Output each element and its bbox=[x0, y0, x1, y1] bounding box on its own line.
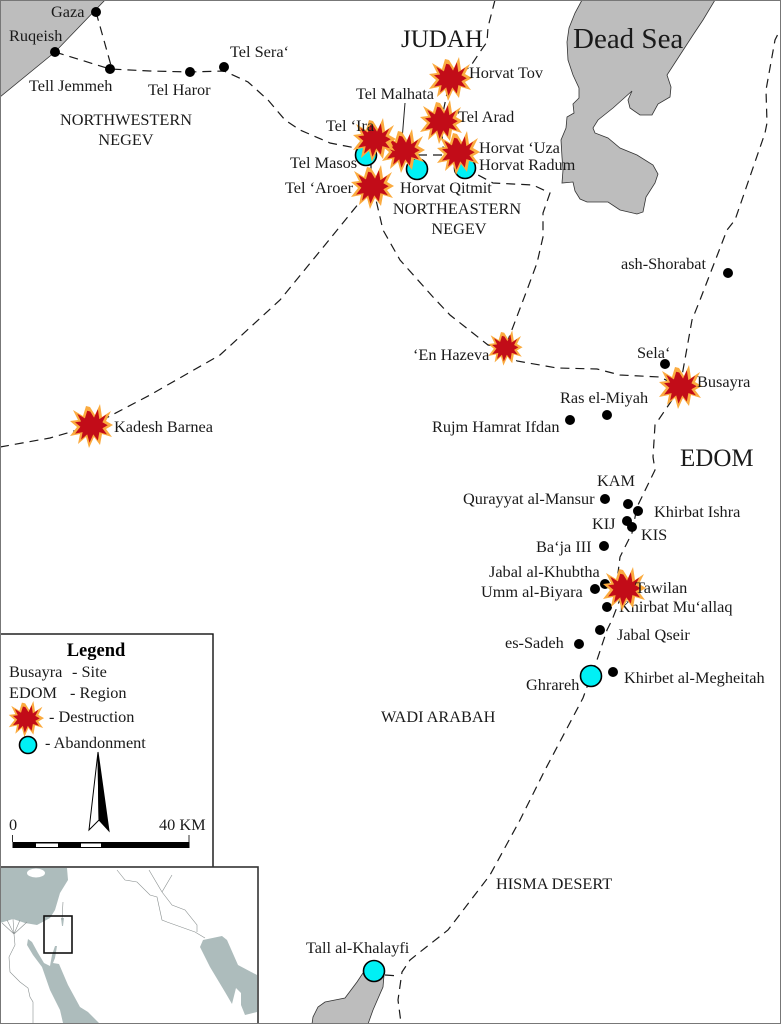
site: Khirbat Ishra: Khirbat Ishra bbox=[654, 502, 740, 521]
inset: study area rectangle bbox=[44, 916, 72, 953]
site: Tel Sera: Tel Sera‘ bbox=[230, 42, 289, 61]
region label: Edom: EDOM bbox=[680, 445, 754, 472]
panel: legend bbox=[0, 634, 213, 868]
site: Tell Jemmeh bbox=[29, 64, 115, 95]
site: KIJ bbox=[592, 514, 632, 533]
site: Jabal al-Khubtha bbox=[489, 562, 610, 589]
abandonment: Tel Masos bbox=[290, 144, 376, 172]
site: Umm al-Biyara: Umm al-Biyara bbox=[481, 582, 583, 601]
site: Qurayyat al-Mansur: Qurayyat al-Mansur bbox=[463, 489, 595, 508]
leader line: Tel Malhata bbox=[402, 103, 405, 140]
destruction: Tel 'Ira: Tel ‘Ira bbox=[326, 116, 374, 135]
destruction: Kadesh Barnea: Kadesh Barnea bbox=[114, 417, 213, 436]
destruction: Kadesh Barnea bbox=[70, 404, 213, 448]
legend: destruction: - Destruction bbox=[49, 707, 134, 726]
site: ash-Shorabat bbox=[621, 254, 733, 278]
region label: Northeastern Negev: NEGEV bbox=[431, 219, 487, 238]
destruction: Tawilan: Tawilan bbox=[635, 578, 687, 597]
inset: Red Sea bbox=[27, 939, 99, 1023]
site: Khirbat Mu'allaq: Khirbat Mu‘allaq bbox=[619, 597, 732, 616]
destruction: Horvat 'Uza bbox=[437, 131, 560, 175]
inset: Dead Sea bbox=[61, 918, 64, 926]
region label: Northeastern Negev: NORTHEASTERN bbox=[393, 199, 521, 218]
site: Gaza: Gaza bbox=[51, 2, 84, 21]
abandonment: Horvat Qitmit: Horvat Qitmit bbox=[400, 178, 492, 197]
site: Tel Sera bbox=[219, 42, 289, 72]
site: KIS: KIS bbox=[641, 525, 667, 544]
inset: rivers bbox=[2, 870, 205, 1023]
site: KIJ: KIJ bbox=[592, 514, 616, 533]
abandonment: Tall al-Khalayfi bbox=[306, 938, 410, 982]
site: Tel Haror: Tel Haror bbox=[148, 80, 211, 99]
Gulf of Aqaba bbox=[312, 973, 384, 1024]
destruction: Tel 'Aroer bbox=[285, 165, 394, 209]
region label: Judah: JUDAH bbox=[401, 26, 483, 53]
destruction: Tel Malhata bbox=[356, 84, 434, 173]
legend: site: - Site bbox=[72, 662, 107, 681]
site: Tel Haror bbox=[148, 67, 211, 99]
abandonment: Ghrareh: Ghrareh bbox=[526, 675, 579, 694]
destruction: Tel 'Aroer: Tel ‘Aroer bbox=[285, 178, 354, 197]
site: Jabal Qseir: Jabal Qseir bbox=[617, 625, 690, 644]
panel: locator inset map bbox=[0, 867, 258, 1024]
abandonment: Horvat Radum bbox=[454, 155, 576, 178]
abandonment: Tall al-Khalayfi: Tall al-Khalayfi bbox=[306, 938, 410, 957]
Dead Sea shape bbox=[561, 0, 715, 214]
destruction: Tawilan bbox=[603, 567, 687, 611]
scale bar bbox=[9, 815, 206, 848]
site: ash-Shorabat: ash-Shorabat bbox=[621, 254, 706, 273]
destruction: Tel 'Ira bbox=[326, 116, 396, 162]
site: Jabal al-Khubtha: Jabal al-Khubtha bbox=[489, 562, 600, 581]
legend: region: - Region bbox=[70, 683, 127, 702]
destruction: 'En Hazeva: ‘En Hazeva bbox=[413, 345, 489, 364]
site: Khirbet al-Megheitah: Khirbet al-Megheitah bbox=[624, 668, 765, 687]
inset: Mediterranean bbox=[0, 868, 68, 925]
site: Rujm Hamrat Ifdan: Rujm Hamrat Ifdan bbox=[432, 417, 560, 436]
site: KIS bbox=[627, 522, 667, 544]
site: Ras el-Miyah bbox=[560, 388, 648, 420]
site: KAM: KAM bbox=[597, 471, 635, 490]
site: Ruqeish bbox=[9, 26, 62, 57]
legend heading: Legend bbox=[67, 641, 126, 661]
abandonment: Horvat Qitmit bbox=[400, 158, 492, 197]
site: Ras el-Miyah: Ras el-Miyah bbox=[560, 388, 648, 407]
destruction: Tel Arad: Tel Arad bbox=[458, 107, 514, 126]
region label: Northwestern Negev: NORTHWESTERN bbox=[60, 110, 192, 129]
region label: Wadi Arabah: WADI ARABAH bbox=[381, 707, 496, 726]
scale bar: 0 bbox=[9, 815, 17, 834]
site: es-Sadeh: es-Sadeh bbox=[505, 633, 564, 652]
destruction: Horvat Tov: Horvat Tov bbox=[469, 63, 544, 82]
region label: Hisma Desert: HISMA DESERT bbox=[496, 874, 612, 893]
site: Tell Jemmeh: Tell Jemmeh bbox=[29, 76, 112, 95]
destruction: Horvat 'Uza: Horvat ‘Uza bbox=[479, 138, 560, 157]
site: KAM bbox=[597, 471, 635, 509]
destruction: Busayra bbox=[659, 365, 750, 409]
abandonment: Tel Masos: Tel Masos bbox=[290, 153, 357, 172]
abandonment: Horvat Radum: Horvat Radum bbox=[479, 155, 576, 174]
inset: Persian Gulf bbox=[200, 936, 257, 1015]
north arrow bbox=[89, 752, 109, 831]
destruction: Busayra: Busayra bbox=[697, 372, 750, 391]
destruction: Tel Malhata: Tel Malhata bbox=[356, 84, 434, 103]
destruction: 'En Hazeva bbox=[413, 330, 523, 366]
legend: site: Busayra bbox=[9, 662, 62, 681]
scale bar: 40 KM bbox=[159, 815, 206, 834]
legend: destruction bbox=[9, 701, 134, 737]
abandonment: Ghrareh bbox=[526, 666, 602, 694]
site: Sela: Sela‘ bbox=[637, 343, 670, 362]
site: Ba'ja III: Ba‘ja III bbox=[536, 537, 592, 556]
site: Gaza bbox=[51, 2, 101, 21]
Mediterranean Sea bbox=[0, 0, 105, 97]
legend: region: EDOM bbox=[9, 683, 57, 702]
destruction: Tel Arad bbox=[420, 100, 514, 144]
site: Ruqeish: Ruqeish bbox=[9, 26, 62, 45]
legend: abandonment: - Abandonment bbox=[45, 733, 146, 752]
region label: Northwestern Negev: NEGEV bbox=[98, 130, 154, 149]
destruction: Horvat Tov bbox=[429, 57, 544, 101]
region label: Dead Sea: Dead Sea bbox=[573, 23, 683, 55]
